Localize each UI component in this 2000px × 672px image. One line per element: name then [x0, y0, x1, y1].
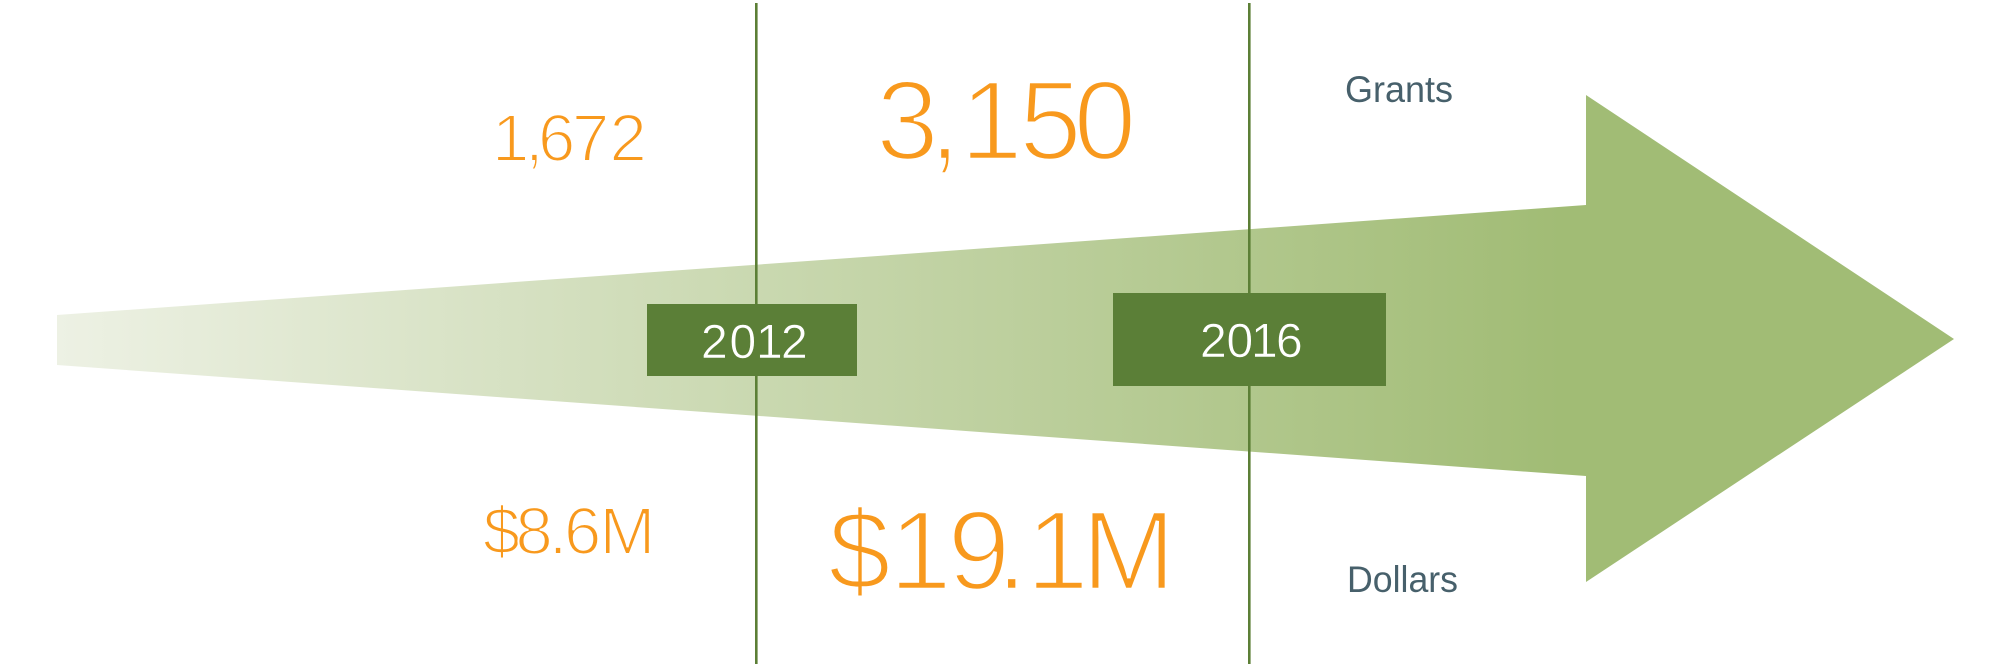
grants 2012: 1,672: [492, 101, 647, 176]
grants 2016: 3,150: [876, 58, 1136, 184]
year box: 2012: 2012: [701, 316, 808, 369]
dollars 2016: $19.1M: [828, 488, 1176, 614]
year box: 2016: 2016: [1200, 315, 1303, 368]
vertical line: 2012: [755, 3, 758, 664]
label: Grants: Grants: [1345, 69, 1453, 110]
year box: 2012: [647, 304, 857, 376]
vertical line: 2016: [1248, 3, 1251, 664]
growth arrow: [57, 95, 1954, 582]
label: Dollars: Dollars: [1347, 559, 1458, 600]
year box: 2016: [1113, 293, 1386, 386]
dollars 2012: $8.6M: [483, 494, 655, 569]
